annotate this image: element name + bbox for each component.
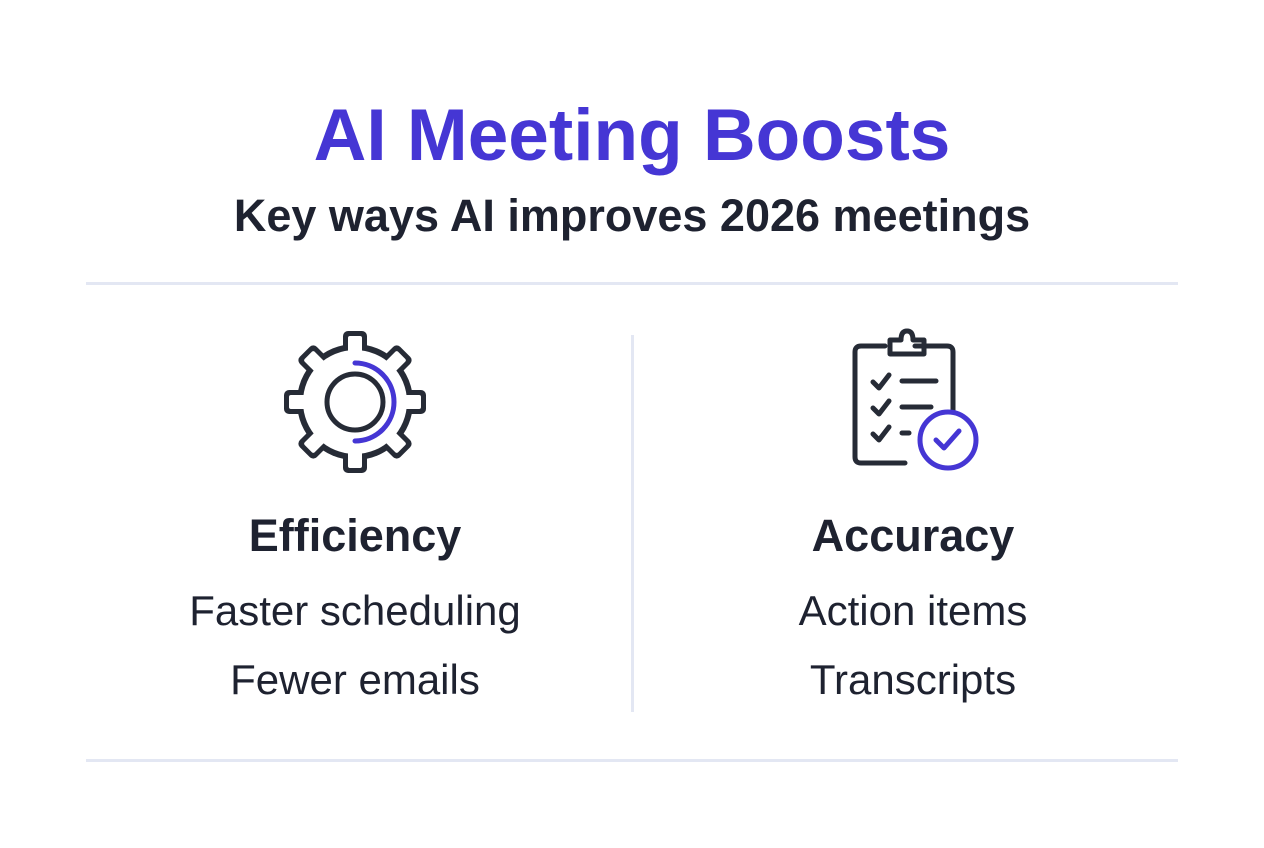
- text: items: Action items: [799, 587, 1027, 634]
- panel: efficiency: [189, 510, 521, 703]
- icon: gear: [284, 331, 426, 473]
- text: items: Faster scheduling: [189, 587, 521, 634]
- heading: accuracy: Accuracy: [812, 510, 1014, 561]
- text: items: Fewer emails: [230, 656, 480, 703]
- panel: accuracy: [798, 510, 1027, 703]
- text: items: Transcripts: [810, 656, 1016, 703]
- title: AI Meeting Boosts: [314, 95, 950, 176]
- text: items: [798, 587, 1027, 703]
- text: items: [189, 587, 521, 703]
- icon: clipboard: [852, 328, 978, 470]
- subtitle: Key ways AI improves 2026 meetings: [234, 190, 1030, 241]
- heading: efficiency: Efficiency: [249, 510, 461, 561]
